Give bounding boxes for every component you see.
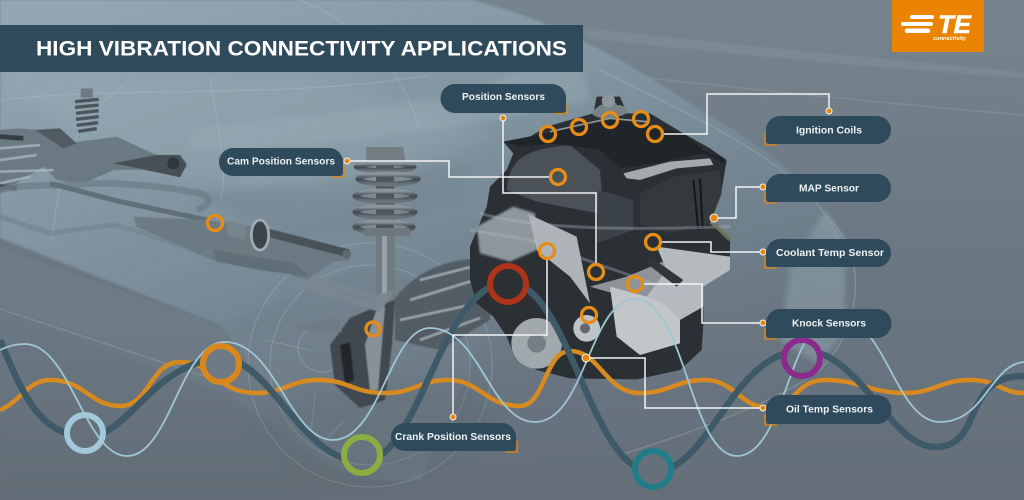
sensor location rings — [208, 112, 662, 336]
engine: crankcase light castings — [477, 207, 537, 262]
front coil spring and strut — [355, 147, 418, 301]
label: Ignition Coils — [765, 116, 891, 145]
vibration waves — [0, 282, 1024, 472]
engine: upper pulley — [592, 102, 627, 118]
label: Knock Sensors: Knock Sensors — [792, 318, 866, 330]
rear suspension — [0, 88, 377, 298]
title banner — [0, 25, 583, 72]
label: MAP Sensor — [765, 174, 891, 203]
label: Position Sensors: Position Sensors — [462, 91, 545, 103]
label: Oil Temp Sensors — [765, 395, 892, 425]
label: MAP Sensor: MAP Sensor — [799, 182, 859, 194]
label: Crank Position Sensors: Crank Position Sensors — [395, 431, 511, 443]
sensor end dots — [344, 108, 832, 420]
label: Cam Position Sensors — [219, 148, 344, 177]
label: Crank Position Sensors — [391, 423, 517, 452]
engine: dark silhouette — [470, 97, 730, 379]
label: Coolant Temp Sensor — [765, 239, 891, 268]
large ring: purple — [784, 340, 820, 376]
front knuckle and brake — [293, 258, 490, 408]
wave: dark teal — [0, 282, 1024, 472]
large ring: teal — [635, 451, 671, 487]
title banner: HIGH VIBRATION CONNECTIVITY APPLICATIONS — [36, 38, 567, 60]
label: Oil Temp Sensors: Oil Temp Sensors — [786, 404, 873, 416]
wheel shadow — [250, 380, 500, 483]
engine: crank pulley — [511, 318, 562, 369]
large ring: green — [344, 437, 380, 473]
label: Cam Position Sensors: Cam Position Sensors — [227, 156, 335, 168]
logo: TE connectivity: TE — [938, 11, 972, 39]
connector lines — [347, 94, 829, 417]
wheel outline — [248, 243, 492, 487]
label: Coolant Temp Sensor: Coolant Temp Sensor — [776, 247, 884, 259]
large ring: orange — [203, 346, 239, 382]
large ring: red — [490, 266, 526, 302]
label: Ignition Coils: Ignition Coils — [796, 124, 862, 136]
engine: intake manifold — [507, 145, 602, 213]
wave: light blue — [0, 299, 1024, 456]
label: Position Sensors — [440, 84, 567, 114]
logo: TE connectivity: connectivity — [933, 36, 967, 42]
large ring: light blue — [67, 415, 103, 451]
engine — [470, 94, 730, 379]
wave: orange — [0, 351, 1024, 410]
label: Knock Sensors — [765, 309, 892, 339]
logo: TE connectivity — [892, 0, 984, 52]
